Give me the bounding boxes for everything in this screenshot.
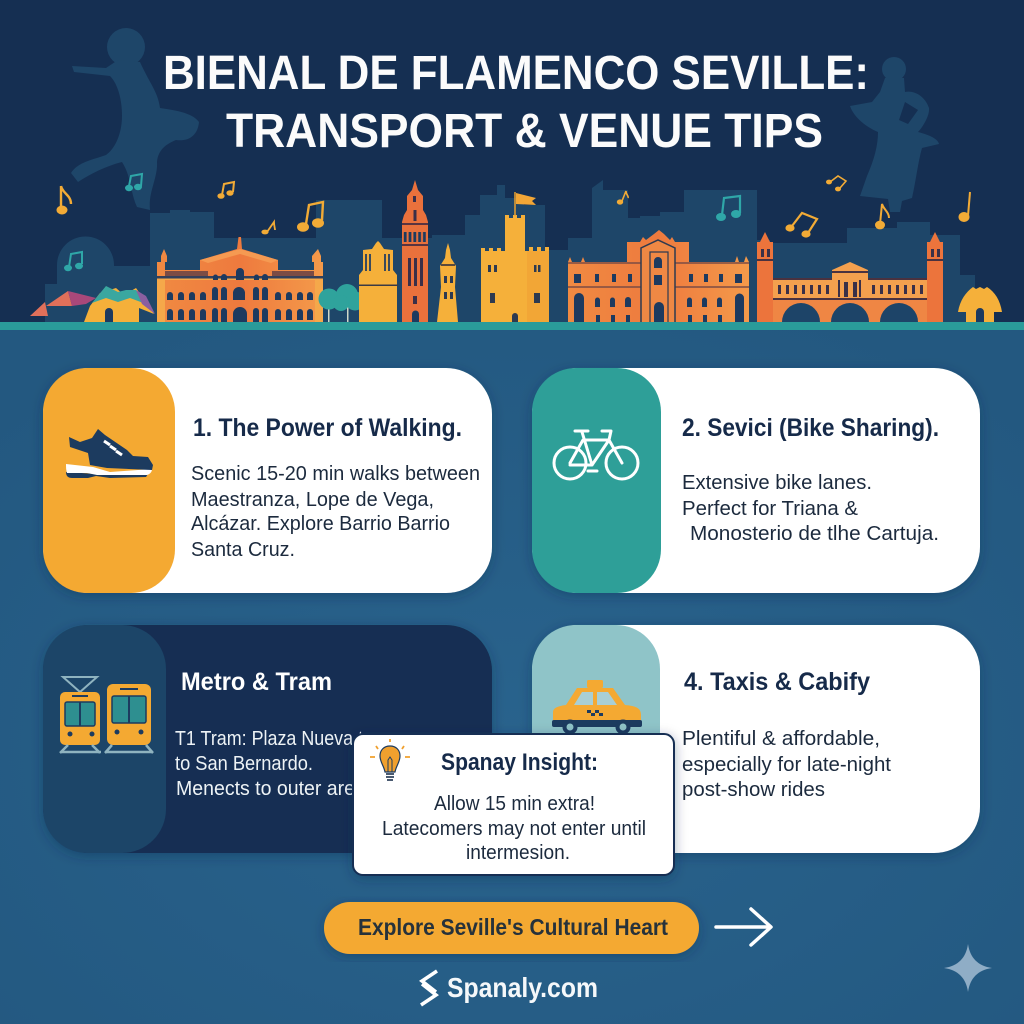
card 1 heading: 1. The Power of Walking. [193,414,462,442]
page background [0,330,1024,1024]
title [163,47,869,158]
building: palace [568,230,749,322]
card 4 heading: 4. Taxis & Cabify [684,668,870,696]
left market tents [30,286,155,322]
trees [318,284,364,322]
card 2 body: Extensive bike lanes. [682,472,872,494]
card 3 body: to San Bernardo. [175,753,313,775]
card 3 body: T1 Tram: Plaza Nueva to [175,728,373,750]
card 4 body: post-show rides [682,779,825,801]
callout body: intermesion. [466,842,570,864]
card 3 body [175,728,381,800]
card 1 body: Maestranza, Lope de Vega, [191,489,434,511]
card 2 icon panel [532,368,661,593]
card 4: taxis [532,625,980,853]
dancer silhouette right [850,57,939,212]
card 4 body: especially for late-night [682,754,891,776]
card 2: bike sharing [532,368,980,593]
building: Torre del Oro with flag [481,192,549,322]
card 1: walking [43,368,492,593]
callout body [382,793,646,864]
icon: trams [60,677,153,753]
callout heading: Spanay Insight: [441,749,598,776]
header background [0,0,1024,323]
title: BIENAL DE FLAMENCO SEVILLE: [163,47,869,100]
title: TRANSPORT & VENUE TIPS [226,105,823,158]
button: explore [324,902,699,954]
button: explore: Explore Seville's Cultural Heart [358,914,668,940]
building: Plaza de Espana arcade [757,232,943,322]
ground strip [0,322,1024,330]
card 2 body: Perfect for Triana & [682,498,859,520]
card 2 heading: 2. Sevici (Bike Sharing). [682,414,939,442]
card 1 body: Alcázar. Explore Barrio Barrio [191,513,450,535]
card 3 icon panel [43,625,166,853]
brand logo: Spanaly.com [447,972,598,1003]
card 4 body: Plentiful & affordable, [682,728,880,750]
card 1 body: Santa Cruz. [191,539,295,561]
callout body: Allow 15 min extra! [434,793,595,815]
card 3 heading: Metro & Tram [181,668,332,696]
card 1 icon panel [43,368,175,593]
icon: light bulb [370,739,410,781]
building: Plaza de Toros Maestranza [157,237,323,322]
card 4 icon panel [532,625,660,853]
right market hut [958,287,1002,322]
icon: bicycle [554,431,638,479]
sparkle [944,944,992,992]
card 2 body: Monosterio de tlhe Cartuja. [690,523,939,545]
card 3: metro and tram [43,625,492,853]
music notes [56,174,970,271]
dancer silhouette left [71,28,199,210]
icon: taxi [552,680,642,734]
card 1 body [191,463,480,561]
callout body: Latecomers may not enter until [382,818,646,840]
card 4 body [682,728,891,801]
building: La Giralda tower [402,180,428,322]
card 2 body [682,472,939,545]
building: cathedral block [359,241,398,322]
arrow [716,909,771,945]
building: small bell tower [437,243,458,322]
callout: insight [353,734,674,875]
card 3 body: Menects to outer areas. [176,778,381,800]
card 1 body: Scenic 15-20 min walks between [191,463,480,485]
skyline silhouette [45,180,975,322]
icon: walking shoe [66,429,153,478]
